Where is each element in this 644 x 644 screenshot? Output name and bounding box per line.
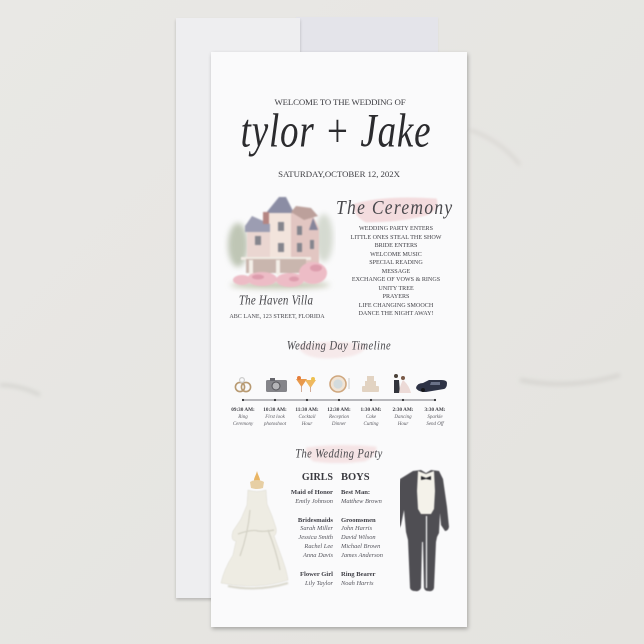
wedding date: SATURDAY,OCTOBER 12, 202X (278, 169, 400, 179)
column headings: GIRLS (302, 472, 333, 483)
icon: limousine (416, 380, 447, 392)
honor attendants: Matthew Brown (341, 498, 382, 505)
icon: cake (362, 376, 379, 392)
bridesmaids and groomsmen: Rachel Lee (304, 542, 333, 550)
column headings (302, 472, 370, 483)
timeline labels: First look (265, 415, 285, 420)
bridesmaids and groomsmen: Bridesmaids (298, 516, 333, 524)
illustration: wedding dress (220, 471, 288, 590)
timeline axis (242, 399, 436, 401)
ceremony list: PRAYERS (383, 294, 409, 300)
bridesmaids and groomsmen: David Wilson (341, 534, 376, 541)
illustration: villa (225, 196, 336, 292)
timeline pink brush stroke (299, 342, 366, 358)
timeline labels: Cake (366, 415, 376, 420)
ceremony list: DANCE THE NIGHT AWAY! (358, 311, 434, 317)
bridesmaids and groomsmen: Sarah Miller (300, 525, 333, 532)
ceremony list: BRIDE ENTERS (375, 243, 417, 249)
timeline labels: Hour (398, 422, 408, 426)
illustration: tuxedo (400, 469, 450, 592)
pink brush stroke (353, 197, 438, 223)
icon: dinner plate (330, 376, 349, 392)
ceremony list: SPECIAL READING (369, 260, 423, 266)
timeline labels: Sparkle (427, 415, 443, 420)
panel: ceremony (336, 195, 454, 223)
timeline labels: 09:30 AM: (231, 406, 255, 412)
ceremony list (350, 226, 442, 317)
panel: party names (291, 472, 383, 586)
bridesmaids and groomsmen: Anna Davis (303, 552, 333, 558)
bridesmaids and groomsmen (298, 516, 383, 558)
program card (211, 52, 467, 627)
honor attendants: Emily Johnson (295, 498, 333, 505)
venue name: The Haven Villa (239, 294, 313, 308)
icon: camera (266, 378, 287, 392)
ceremony list: WELCOME MUSIC (370, 252, 422, 258)
timeline labels: Dinner (332, 422, 346, 426)
ceremony list: WEDDING PARTY ENTERS (359, 226, 433, 232)
heading: couple names: tylor + Jake (241, 105, 431, 158)
timeline labels (231, 406, 445, 426)
flower girl and ring bearer: Ring Bearer (341, 571, 376, 578)
ceremony list: UNITY TREE (378, 286, 414, 292)
ceremony list: MESSAGE (382, 268, 410, 274)
bridesmaids and groomsmen: John Harris (341, 525, 372, 532)
ceremony list: EXCHANGE OF VOWS & RINGS (352, 277, 440, 283)
venue address: ABC LANE, 123 STREET, FLORIDA (229, 314, 325, 320)
timeline labels: Ring (238, 415, 248, 420)
ceremony heading: The Ceremony (336, 195, 454, 218)
honor attendants: Maid of Honor (291, 489, 333, 496)
icon: cocktails (296, 376, 316, 392)
bridesmaids and groomsmen: Groomsmen (341, 516, 376, 524)
flower girl and ring bearer (300, 571, 376, 586)
column headings: BOYS (341, 472, 370, 483)
timeline heading: Wedding Day Timeline (287, 340, 391, 353)
flower girl and ring bearer: Noah Harris (341, 580, 374, 586)
timeline labels: 10:30 AM: (263, 406, 287, 412)
heading: welcome line: WELCOME TO THE WEDDING OF (275, 97, 405, 107)
icon: dancing couple (394, 374, 411, 393)
honor attendants (291, 489, 382, 505)
timeline labels: Send Off (426, 422, 444, 426)
ceremony list: LIFE CHANGING SMOOCH (359, 302, 433, 308)
party pink brush stroke (306, 444, 377, 464)
bridesmaids and groomsmen: Jessica Smith (298, 534, 333, 541)
wedding party heading: The Wedding Party (295, 448, 383, 461)
bridesmaids and groomsmen: James Anderson (341, 552, 383, 558)
chart: wedding day timeline (234, 374, 447, 402)
timeline labels: 1:30 AM: (361, 406, 381, 412)
icon: rings (235, 378, 251, 392)
timeline labels: Cocktail (299, 415, 315, 420)
envelope (176, 18, 300, 598)
ceremony list: LITTLE ONES STEAL THE SHOW (350, 234, 442, 240)
timeline labels: Ceremony (233, 422, 253, 426)
timeline labels: Dancing (394, 415, 412, 420)
timeline labels: 3:30 AM: (425, 406, 445, 412)
timeline labels: photoshoot (264, 422, 286, 426)
timeline labels: Hour (302, 422, 312, 426)
envelope back flap (296, 17, 438, 57)
timeline labels: 2:30 AM: (393, 406, 413, 412)
timeline labels: 12:30 AM: (327, 406, 351, 412)
honor attendants: Best Man: (341, 489, 370, 496)
timeline labels: Cutting (363, 422, 379, 426)
flower girl and ring bearer: Lily Taylor (305, 580, 333, 586)
timeline labels: Reception (329, 415, 349, 420)
timeline labels: 11:30 AM: (295, 406, 319, 412)
bridesmaids and groomsmen: Michael Brown (341, 542, 380, 550)
flower girl and ring bearer: Flower Girl (300, 571, 333, 578)
